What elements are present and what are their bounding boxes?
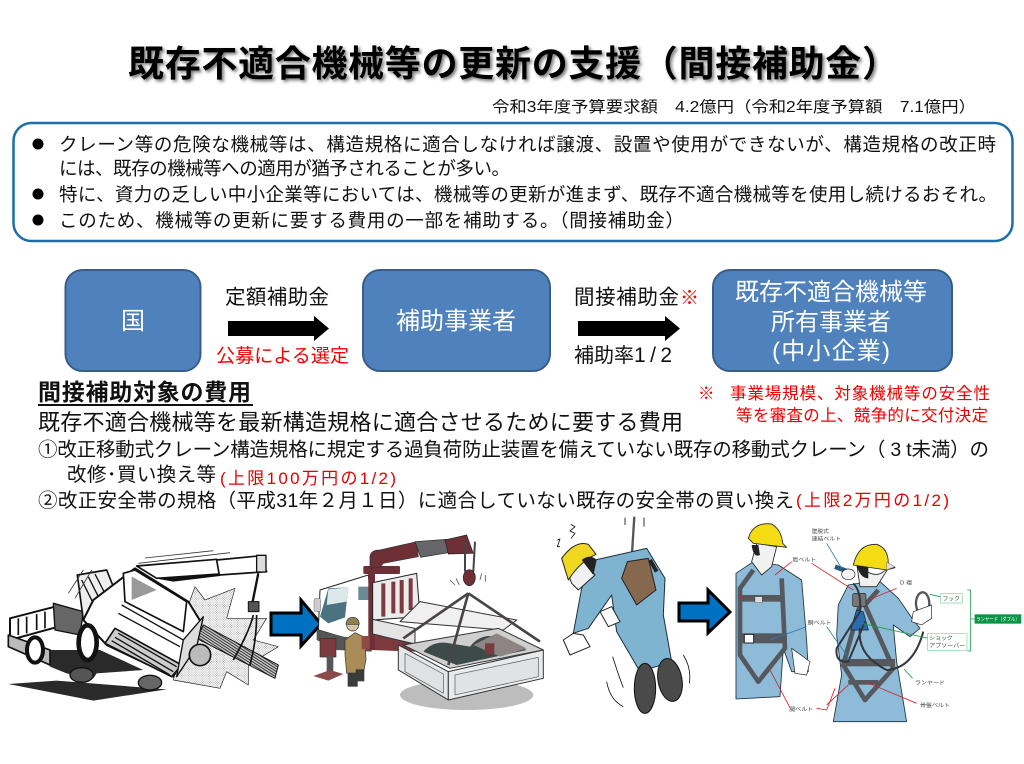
harness labels: D 環 — [900, 579, 913, 586]
title: 既存不適合機械等の更新の支援（間接補助金） — [130, 45, 900, 86]
arrow: crane improvement — [271, 600, 321, 646]
title: 既存不適合機械等の更新の支援（間接補助金） — [128, 43, 898, 84]
arrow: 国 to 補助事業者 — [228, 316, 329, 341]
label: フック — [941, 594, 962, 603]
leader lines — [738, 543, 975, 710]
bullet 2: 特に、資力の乏しい中小企業等においては、機械等の更新が進まず、既存不適合機械等を使用し続けるおそれ。 — [59, 184, 997, 205]
flow label: 間接補助金※: ※ — [680, 288, 699, 309]
flow box: 既存不適合機械等所有事業者: 所有事業者 — [771, 309, 891, 336]
harness labels: 腿ベルト — [789, 705, 813, 713]
flow label: 補助率1/2: 補助率 — [574, 344, 634, 367]
label: ショックアブソーバー: アブソーバー — [929, 642, 966, 650]
flow box: 補助事業者: 補助事業者 — [396, 308, 516, 335]
subheading text: 既存不適合機械等を最新構造規格に適合させるために要する費用 — [38, 410, 683, 435]
flow box: 既存不適合機械等所有事業者: 既存不適合機械等 — [735, 279, 927, 306]
item 2: ②改正安全帯の規格（平成31年２月１日）に適合していない既存の安全帯の買い換え — [38, 490, 794, 512]
bullet 1: クレーン等の危険な機械等は、構造規格に適合しなければ譲渡、設置や使用ができないが、構造規格の改正時 — [59, 134, 996, 155]
flow label: 補助率1/2: 1/2 — [634, 344, 672, 367]
flow label: 公募による選定: 公募による選定 — [216, 345, 349, 367]
harness labels: 墜脱式 — [812, 527, 830, 535]
flow box: 国 — [66, 270, 200, 371]
bullet 1 — [32, 134, 996, 179]
item 2: (上限2万円の1/2) — [796, 491, 949, 510]
flow label: 間接補助金※: 間接補助金 — [574, 286, 679, 309]
label: ランヤード（ダブル） — [975, 614, 1021, 624]
item 1: (上限100万円の1/2) — [220, 469, 396, 488]
flow box: 既存不適合機械等所有事業者: (中小企業) — [772, 338, 890, 365]
label: フック: フック — [943, 595, 960, 602]
harness labels: 胴ベルト — [808, 620, 832, 627]
flow label: 補助率1/2 — [574, 344, 672, 367]
illustration: compliant crane truck — [313, 535, 543, 710]
illustration: falling worker — [557, 517, 690, 713]
arrow: 補助事業者 to 所有事業者 — [578, 316, 680, 341]
item 1: 改修･買い換え等 — [67, 464, 216, 486]
label: ショックアブソーバー — [928, 634, 967, 650]
red note — [698, 384, 990, 425]
back worker — [833, 544, 932, 722]
harness labels — [789, 527, 950, 713]
heading: 間接補助対象の費用: 間接補助対象の費用 — [38, 379, 251, 405]
item 1: ①改正移動式クレーン構造規格に規定する過負荷防止装置を備えていない既存の移動式クレーン（ 3 t未満）の — [38, 439, 989, 461]
red note: 事業場規模、対象機械等の安全性 — [730, 384, 990, 403]
red note: 等を審査の上、競争的に交付決定 — [736, 406, 988, 425]
flow box: 国: 国 — [121, 308, 145, 335]
harness labels: ランヤード — [915, 680, 945, 687]
panel: summary — [14, 123, 1012, 241]
flow box: 補助事業者 — [363, 270, 550, 371]
front worker — [736, 524, 810, 699]
label: ショックアブソーバー: ショック — [929, 635, 953, 642]
illustration: full harness diagram — [736, 524, 1021, 722]
harness labels: 肩ベルト — [792, 557, 816, 564]
arrow: harness improvement — [679, 590, 730, 633]
budget note: 令和3年度予算要求額 4.2億円（令和2年度予算額 7.1億円） — [492, 97, 976, 116]
harness labels: 骨盤ベルト — [920, 701, 950, 709]
flow box: 既存不適合機械等所有事業者 — [713, 270, 952, 371]
bullet 3: このため、機械等の更新に要する費用の一部を補助する。（間接補助金） — [59, 210, 684, 231]
illustration: overturned crane truck — [8, 551, 278, 701]
harness labels: 連結ベルト — [812, 534, 841, 542]
red note: ※ — [698, 385, 714, 403]
item 1 — [38, 439, 989, 488]
bullet 1: には、既存の機械等への適用が猶予されることが多い。 — [59, 158, 510, 179]
flow label: 定額補助金: 定額補助金 — [225, 286, 329, 309]
